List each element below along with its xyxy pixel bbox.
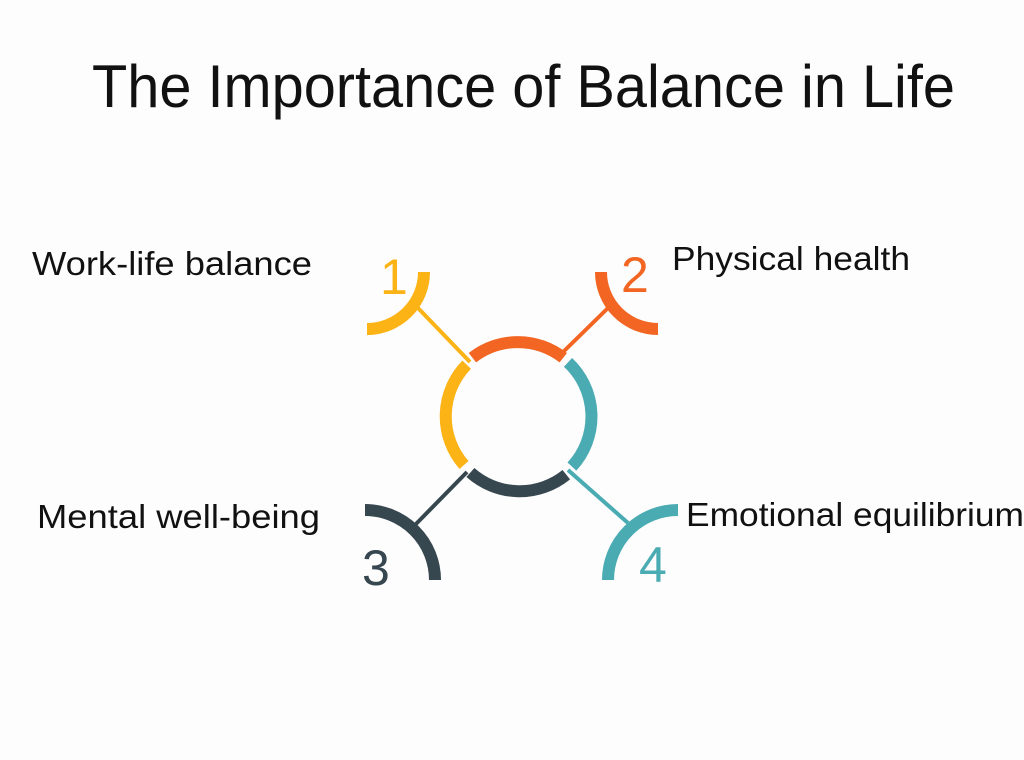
label: emotional equilibrium: Emotional equilibrium: [686, 496, 1024, 533]
outer arc 1: [367, 272, 424, 329]
ring arc: dark bottom: [470, 472, 566, 491]
title: The Importance of Balance in Life: [92, 53, 955, 120]
number 1: 1: [380, 249, 408, 305]
outer arc 4: [608, 510, 678, 580]
ring arc: orange top: [472, 342, 563, 358]
ring arc: yellow left: [446, 365, 467, 465]
number 2: 2: [621, 247, 649, 303]
outer arc 2: [601, 272, 658, 329]
label: physical health: Physical health: [672, 240, 910, 277]
connector 2: [560, 308, 608, 355]
outer arc 3: [365, 510, 435, 580]
connector 3: [415, 472, 467, 525]
central ring diagram: [365, 272, 678, 580]
label: work-life balance: Work-life balance: [32, 245, 312, 282]
ring arc: teal right: [568, 362, 591, 467]
number 3: 3: [362, 540, 390, 596]
connector 4: [568, 470, 628, 523]
number 4: 4: [639, 537, 667, 593]
label: mental well-being: Mental well-being: [37, 498, 320, 535]
connector 1: [418, 308, 470, 362]
